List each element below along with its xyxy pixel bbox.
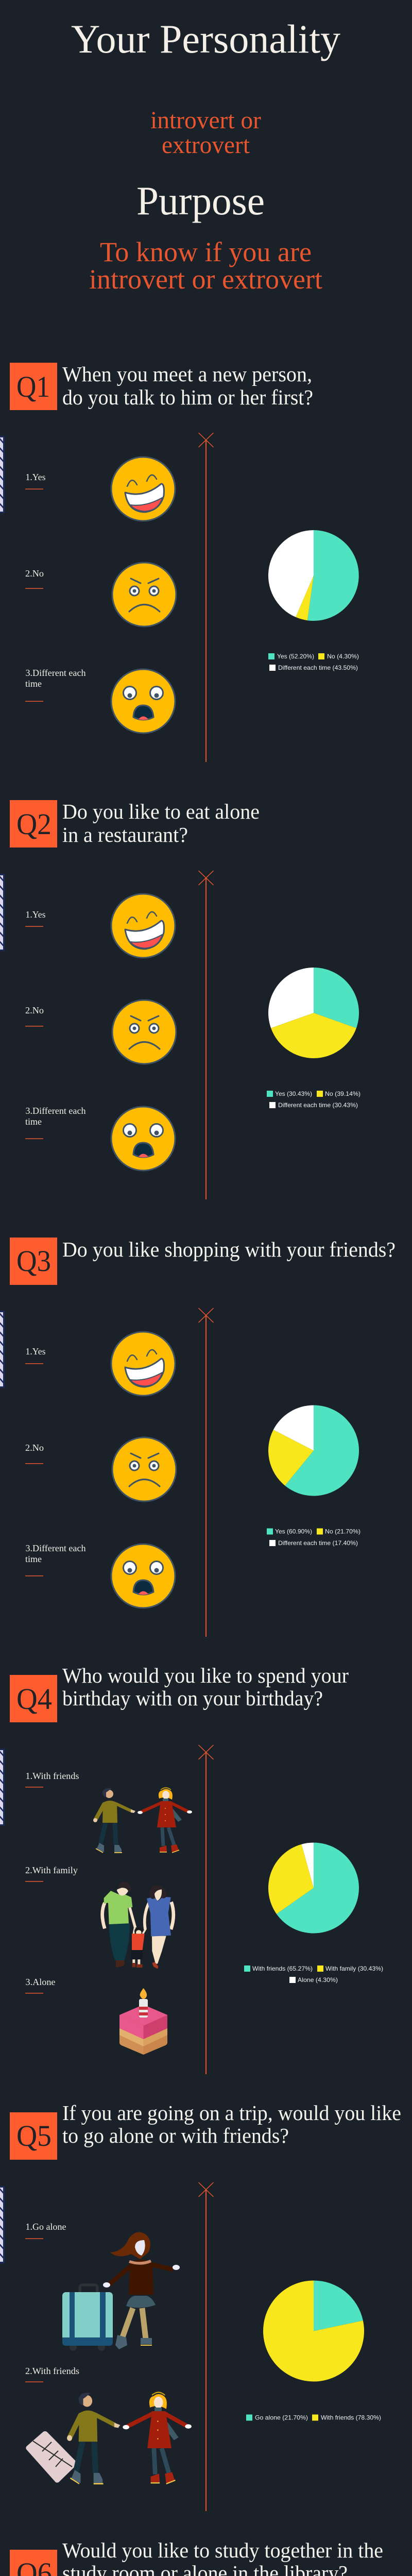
legend: With family (30.43%) xyxy=(325,1965,383,1972)
legend: No (21.70%) xyxy=(325,1528,360,1535)
option 1 label: 1.Yes xyxy=(26,472,45,482)
pie chart xyxy=(268,530,359,621)
timeline divider xyxy=(199,1745,213,2074)
option 2 label xyxy=(25,1005,44,1026)
title: Your Personality xyxy=(71,16,340,61)
Q2 question text: in a restaurant? xyxy=(62,823,188,846)
legend: With friends (65.27%) xyxy=(252,1965,313,1972)
icon: shocked face xyxy=(111,1107,175,1171)
legend: With friends (78.30%) xyxy=(321,2414,381,2421)
panel: question 2 xyxy=(0,800,360,1199)
side stripe xyxy=(0,2186,5,2263)
legend: Yes (30.43%) xyxy=(275,1090,312,1097)
Q3 badge: Q3 xyxy=(16,1244,51,1278)
option 2 label: 2.No xyxy=(25,1005,44,1015)
legend: No (4.30%) xyxy=(327,653,359,660)
option 3 label: time xyxy=(25,679,42,689)
legend: No (39.14%) xyxy=(325,1090,360,1097)
option 1 label xyxy=(25,472,45,489)
purpose statement: introvert or extrovert xyxy=(89,264,322,295)
panel: question 3 xyxy=(0,1238,396,1637)
option 1 label xyxy=(25,2222,66,2239)
Q1 question text: do you talk to him or her first? xyxy=(62,385,313,409)
option 2 label xyxy=(25,1443,44,1464)
side stripe xyxy=(0,874,5,951)
icon: birthday cake xyxy=(119,1988,167,2055)
legend xyxy=(268,653,359,671)
Q4 question text: Who would you like to spend your xyxy=(62,1664,349,1687)
Q4 question text xyxy=(62,1664,349,1710)
option 1 label: 1.Yes xyxy=(26,909,45,920)
legend: Different each time (43.50%) xyxy=(278,664,358,671)
panel: question 5 xyxy=(0,2101,401,2511)
Q1 badge xyxy=(10,363,57,410)
option 2 label: 2.With friends xyxy=(25,2366,79,2376)
option 2 label xyxy=(25,1865,78,1882)
legend xyxy=(246,2414,381,2421)
option 3 label xyxy=(25,1977,56,1994)
Q1 question text: When you meet a new person, xyxy=(62,362,312,386)
Q5 badge xyxy=(10,2112,57,2160)
icon: angry face xyxy=(112,563,176,626)
legend: Yes (52.20%) xyxy=(277,653,314,660)
option 1 label: 1.Go alone xyxy=(26,2222,66,2232)
timeline divider xyxy=(199,871,213,1199)
Q1 question text xyxy=(62,362,313,409)
icon: laughing face xyxy=(111,457,175,521)
Q2 badge: Q2 xyxy=(16,807,52,841)
option 1 label: 1.Yes xyxy=(26,1346,45,1357)
side stripe xyxy=(0,1311,5,1388)
option 3 label: time xyxy=(25,1116,42,1127)
legend xyxy=(267,1528,360,1547)
Q6 question text xyxy=(62,2538,383,2576)
Q5 question text xyxy=(62,2101,401,2147)
option 2 label xyxy=(25,568,44,589)
legend: Different each time (30.43%) xyxy=(278,1101,358,1109)
icon: laughing face xyxy=(111,894,175,958)
side stripe xyxy=(0,436,5,513)
option 1 label: 1.With friends xyxy=(26,1771,79,1781)
option 1 label xyxy=(25,1771,79,1788)
option 2 label: 2.With family xyxy=(25,1865,78,1875)
icon: traveller with suitcase xyxy=(62,2232,180,2351)
Q2 question text: Do you like to eat alone xyxy=(62,800,260,823)
icon: angry face xyxy=(112,1000,176,1064)
option 1 label xyxy=(25,909,45,927)
timeline divider xyxy=(199,1308,213,1637)
Q2 badge xyxy=(10,800,57,848)
Q4 badge xyxy=(10,1675,57,1722)
option 3 label: 3.Different each xyxy=(26,1543,85,1553)
legend: Alone (4.30%) xyxy=(298,1976,338,1984)
Q4 badge: Q4 xyxy=(16,1682,52,1716)
pie chart xyxy=(263,2280,364,2381)
timeline divider xyxy=(199,433,213,762)
icon: laughing face xyxy=(111,1332,175,1396)
legend xyxy=(267,1090,360,1109)
purpose statement: To know if you are xyxy=(100,236,312,267)
icon: family xyxy=(102,1882,174,1969)
legend xyxy=(244,1965,383,1984)
option 3 label xyxy=(25,1106,85,1139)
pie chart xyxy=(268,1405,359,1496)
Q3 badge xyxy=(10,1238,57,1285)
Q5 question text: to go alone or with friends? xyxy=(62,2124,289,2147)
Q5 question text: If you are going on a trip, would you like xyxy=(62,2101,401,2125)
Q3 question text: Do you like shopping with your friends? xyxy=(62,1238,396,1261)
Q2 question text xyxy=(62,800,260,846)
timeline divider xyxy=(199,2182,213,2511)
Q6 question text: Would you like to study together in the xyxy=(62,2538,383,2562)
legend: Yes (60.90%) xyxy=(275,1528,312,1535)
Q5 badge: Q5 xyxy=(16,2119,52,2153)
Q1 badge: Q1 xyxy=(16,370,50,403)
pie chart xyxy=(268,968,359,1058)
legend: Different each time (17.40%) xyxy=(278,1539,358,1547)
heading: purpose: Purpose xyxy=(136,178,265,223)
option 2 label: 2.No xyxy=(25,1443,44,1453)
panel: question 1 xyxy=(0,362,359,762)
Q6 badge xyxy=(10,2550,57,2576)
option 1 label xyxy=(25,1346,45,1364)
option 3 label: 3.Different each xyxy=(26,1106,85,1116)
subtitle: extrovert xyxy=(162,131,250,159)
icon: two friends xyxy=(93,1788,192,1853)
icon: angry face xyxy=(112,1437,176,1501)
pie chart xyxy=(268,1842,359,1933)
icon: shocked face xyxy=(111,669,175,733)
panel: question 4 xyxy=(0,1664,383,2074)
option 3 label: 3.Different each xyxy=(26,668,85,678)
subtitle: introvert or xyxy=(150,107,261,134)
option 2 label xyxy=(25,2366,79,2382)
icon: friends with suitcase xyxy=(26,2392,192,2484)
legend: Go alone (21.70%) xyxy=(255,2414,308,2421)
side stripe xyxy=(0,1749,5,1826)
subtitle xyxy=(150,107,261,159)
option 2 label: 2.No xyxy=(25,568,44,579)
option 3 label: time xyxy=(25,1554,42,1564)
purpose statement xyxy=(89,236,322,295)
Q4 question text: birthday with on your birthday? xyxy=(62,1686,323,1710)
option 3 label xyxy=(25,1543,85,1577)
option 3 label xyxy=(25,668,85,702)
option 3 label: 3.Alone xyxy=(26,1977,56,1987)
panel: question 6 xyxy=(0,2538,399,2576)
icon: shocked face xyxy=(111,1544,175,1608)
